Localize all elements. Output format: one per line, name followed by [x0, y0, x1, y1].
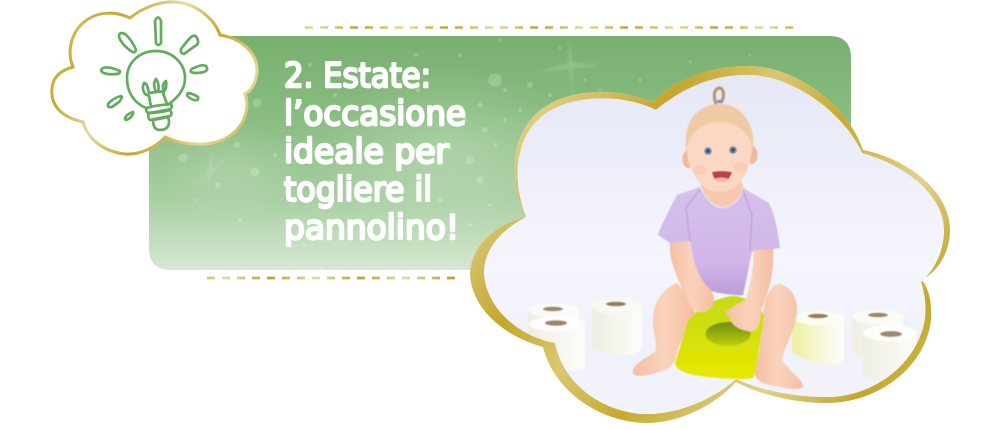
left leg [633, 283, 695, 376]
gold band [470, 66, 950, 423]
heading: 2. Estate: [284, 56, 431, 95]
potty hole [706, 322, 750, 346]
big cloud white base [470, 66, 950, 423]
heading: togliere il [284, 170, 432, 209]
right leg [754, 284, 803, 389]
dashed line: top [305, 26, 797, 29]
panel: green background [149, 36, 851, 273]
neck [700, 181, 744, 208]
heading: ideale per [284, 132, 449, 171]
heading: l’occasione [284, 94, 466, 133]
small cloud with lightbulb [52, 2, 257, 154]
right arm [725, 249, 773, 331]
cloud outline [52, 2, 257, 154]
heading: pannolino! [284, 208, 459, 247]
potty [675, 296, 764, 379]
shirt [658, 187, 780, 295]
toilet rolls [528, 298, 917, 382]
heading [284, 56, 466, 247]
icon: lightbulb [101, 18, 207, 130]
head [682, 88, 758, 192]
dashed line: bottom [207, 277, 455, 279]
photo: baby on potty [484, 75, 944, 414]
left arm [670, 241, 714, 312]
